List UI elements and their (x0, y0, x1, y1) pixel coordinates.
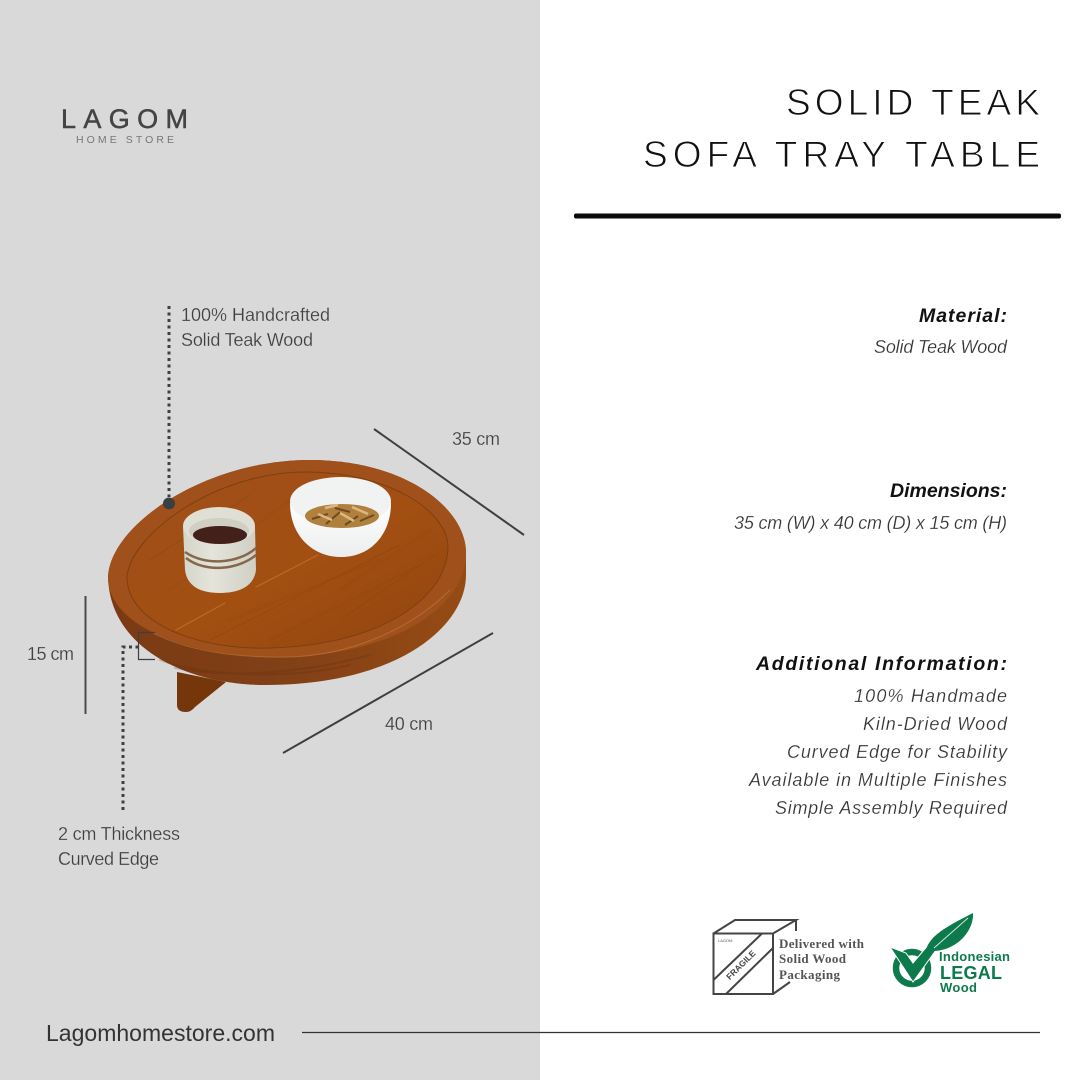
callout text: edge thickness (58, 824, 180, 869)
spec: additional information: Simple Assembly Required (775, 798, 1008, 818)
callout text: handcrafted teak: Solid Teak Wood (181, 330, 313, 350)
logo: Lagom Home Store: LAGOM (61, 104, 188, 134)
tray leg (177, 672, 226, 712)
spec: additional information: Available in Multiple Finishes (748, 770, 1007, 790)
icon: fragile wood packaging box: Solid Wood (779, 951, 847, 966)
icon: fragile wood packaging box (714, 920, 865, 994)
callout text: handcrafted teak (181, 305, 330, 350)
icon: fragile wood packaging box: FRAGILE (724, 948, 758, 982)
spec: additional information: Curved Edge for Stability (787, 742, 1008, 762)
tray inner surface (127, 472, 448, 648)
tray body edge (108, 460, 466, 685)
dimension label: 40 cm: 40 cm (385, 714, 433, 734)
product photo: teak sofa tray table (108, 460, 466, 712)
title: SOFA TRAY TABLE (643, 134, 1040, 175)
callout text: handcrafted teak: 100% Handcrafted (181, 305, 330, 325)
callout: edge thickness leader (123, 632, 155, 810)
dimension line: 35 cm (374, 429, 524, 535)
title (643, 82, 1040, 175)
callout: handcrafted teak leader (163, 306, 175, 510)
dimension label: 35 cm: 35 cm (452, 429, 500, 449)
spec: additional information (748, 653, 1008, 818)
wood grain (150, 495, 450, 674)
icon: fragile wood packaging box: Packaging (779, 967, 840, 982)
icon: fragile wood packaging box: LAGOM (718, 938, 732, 943)
website: Lagomhomestore.com (46, 1020, 275, 1046)
bowl with granola (290, 477, 391, 557)
icon: Indonesian Legal Wood: Wood (940, 980, 977, 995)
spec: additional information: 100% Handmade (854, 686, 1007, 706)
icon: Indonesian Legal Wood (890, 913, 1010, 995)
tray top rim (108, 460, 466, 657)
callout text: edge thickness: Curved Edge (58, 849, 159, 869)
title underline (574, 214, 1061, 218)
dimension label: 15 cm: 15 cm (27, 644, 74, 664)
icon: fragile wood packaging box: Delivered with (779, 936, 865, 951)
dimension line: 40 cm (283, 633, 493, 753)
spec: additional information: Kiln-Dried Wood (863, 714, 1008, 734)
spec: dimensions: Dimensions: (890, 480, 1007, 502)
dimension line: 15 cm (84, 596, 86, 714)
panel: grey left background (0, 0, 540, 1080)
spec: dimensions: 35 cm (W) x 40 cm (D) x 15 cm (H) (734, 513, 1007, 533)
title: SOLID TEAK (786, 82, 1040, 123)
spec: dimensions (734, 480, 1007, 533)
logo: Lagom Home Store: HOME STORE (76, 134, 174, 146)
icon: Indonesian Legal Wood: LEGAL (940, 963, 1002, 983)
icon: Indonesian Legal Wood: Indonesian (939, 949, 1010, 964)
callout text: edge thickness: 2 cm Thickness (58, 824, 180, 844)
spec: material: Material: (919, 305, 1007, 327)
spec: material: Solid Teak Wood (874, 337, 1008, 357)
spec: material (874, 305, 1008, 357)
spec: additional information: Additional Information: (755, 653, 1007, 675)
cup (183, 507, 256, 593)
